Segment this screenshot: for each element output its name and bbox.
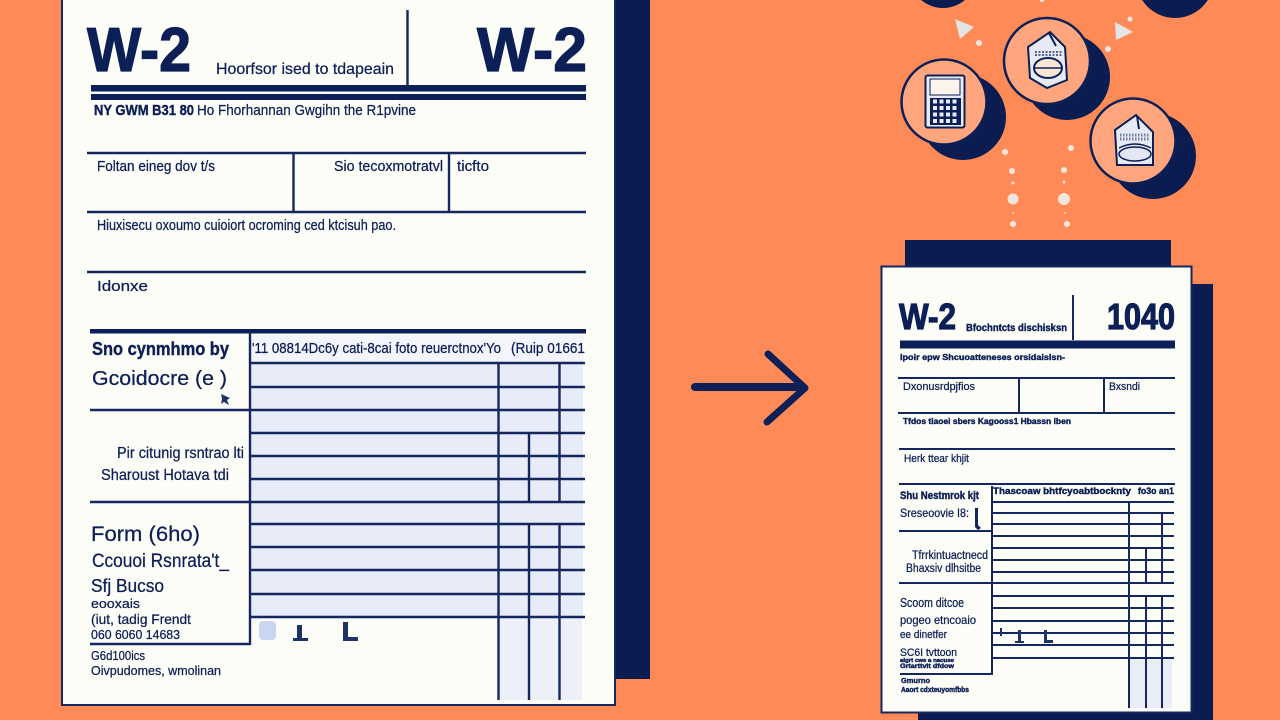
small form heading: W-2 — [899, 296, 956, 337]
small form paper sheet — [882, 266, 1192, 712]
form side labels: eooxais — [91, 596, 141, 611]
small form side labels: pogeo etncoaio — [900, 613, 976, 627]
small form side labels: Grtarttvit dfdow — [900, 664, 954, 670]
form table: (Ruip 01661 — [511, 340, 585, 357]
form heading: W-2 — [87, 16, 191, 85]
small form heading: 1040 — [1107, 296, 1175, 337]
small form side labels: Tfrrkintuactnecd — [912, 550, 988, 562]
form paper sheet — [62, 0, 615, 705]
icon: tag badge centre — [1004, 18, 1110, 120]
form side labels: Gcoidocre (e ) — [92, 368, 227, 390]
icon: calculator badge — [902, 60, 1006, 160]
form identification rows — [87, 153, 586, 295]
small form heading: Bfochntcts dischisksn — [966, 323, 1067, 334]
form identification rows: ticfto — [457, 158, 489, 175]
small form identification rows: Dxonusrdpjfios — [903, 381, 975, 393]
small form side labels: Scoom ditcoe — [900, 595, 964, 610]
form identification rows: Foltan eineg dov t/s — [97, 158, 215, 175]
form side labels: Form (6ho) — [91, 523, 200, 546]
particles falling to the small form — [955, 0, 1133, 227]
form side labels — [91, 339, 244, 678]
form identification rows: Sio tecoxmotratvl — [334, 158, 443, 175]
small form side labels: algrt cwe a nacuse — [900, 658, 954, 664]
form small marks — [259, 621, 358, 641]
top partial circles — [909, 0, 1214, 18]
form table: '11 08814Dc6y cati-8cai foto reuerctnox'Yo — [252, 340, 501, 357]
small form table: Thascoaw bhtfcyoabtbocknty — [993, 486, 1131, 496]
form side labels: 060 6060 14683 — [91, 627, 180, 642]
arrow — [695, 354, 805, 422]
small form marks — [1000, 628, 1053, 643]
small form identification rows: Bxsndi — [1109, 381, 1140, 393]
small form side labels: Gmurno — [901, 676, 930, 685]
form table — [90, 329, 586, 700]
form side labels: Sharoust Hotava tdi — [101, 467, 229, 484]
small form identification rows — [898, 378, 1175, 465]
form subheading text — [94, 102, 416, 119]
panel: large W-2 form — [62, 0, 650, 705]
form side labels: Pir citunig rsntrao lti — [117, 445, 244, 462]
small form side labels: Aaort cdxteuyomfbbs — [901, 687, 969, 694]
form identification rows: Hiuxisecu oxoumo cuioiort ocroming ced ktcisuh pao. — [97, 217, 396, 234]
form side labels: Ccouoi Rsnrata't_ — [92, 551, 229, 572]
form subheading text: NY GWM B31 80 — [94, 102, 194, 119]
form subheading text: Ho Fhorhannan Gwgihn the R1pvine — [197, 102, 416, 119]
icon: tag badge right — [1090, 98, 1196, 199]
small form side labels: ee dinetfer — [900, 629, 947, 641]
form side labels: Sno cynmhmo by — [92, 339, 229, 359]
panel: small 1040 form — [882, 240, 1213, 720]
form drop shadow — [612, 0, 650, 679]
small form identification rows: Herk ttear khjit — [904, 453, 969, 465]
form side labels: (iut, tadig Frendt — [91, 611, 191, 627]
small form table: fo3o an1 — [1138, 486, 1174, 496]
form side labels: Sfj Bucso — [91, 576, 164, 596]
small form side labels: SC6I tvttoon — [900, 647, 957, 659]
small form side labels: Sreseoovie I8: — [900, 506, 969, 520]
small form drop shadow — [918, 284, 1213, 720]
small form side labels: Shu Nestmrok kjt — [900, 490, 979, 502]
form side labels: G6d100ics — [91, 648, 145, 663]
small form side labels — [900, 490, 988, 694]
form heading: Hoorfsor ised to tdapeain — [216, 61, 394, 78]
small form identification rows: Tfdos tiaoei sbers Kagooss1 Hbassn lben — [903, 416, 1071, 426]
small form table — [899, 484, 1175, 708]
small form heading: Ipoir epw Shcuoatteneses orsidaislsn- — [900, 352, 1065, 362]
stacked sheet behind — [905, 240, 1171, 270]
form identification rows: Idonxe — [97, 278, 148, 295]
form heading: W-2 — [477, 16, 587, 85]
form side labels: Oivpudomes, wmolinan — [91, 663, 221, 678]
small form heading — [899, 295, 1175, 362]
form heading — [87, 10, 587, 100]
small form side labels: Bhaxsiv dlhsitbe — [906, 563, 981, 575]
